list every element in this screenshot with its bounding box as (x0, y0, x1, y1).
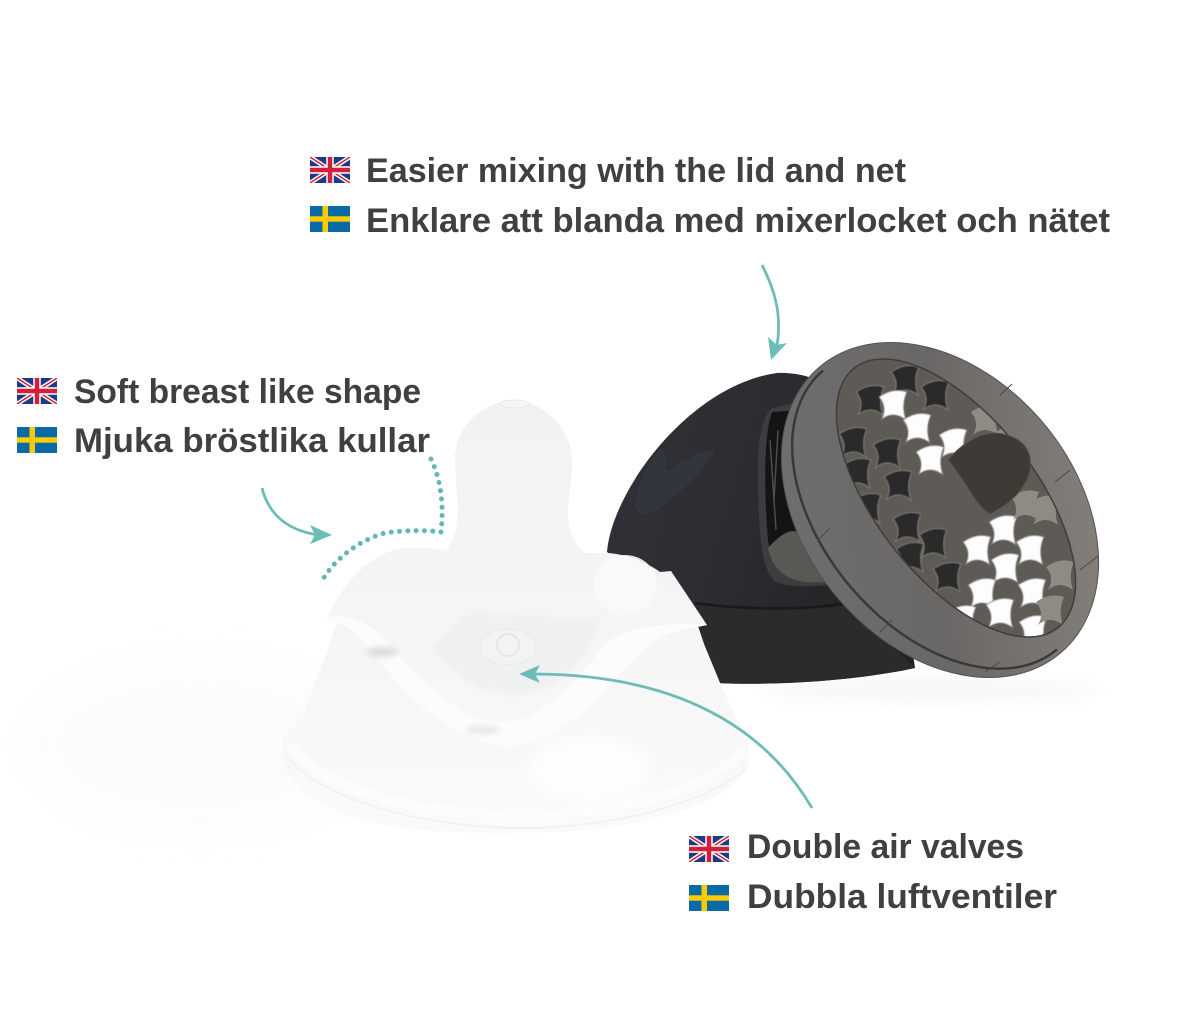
dome lower ring (690, 602, 915, 684)
english text: Soft breast like shape (74, 373, 421, 411)
mesh holes: see-through white (879, 390, 1047, 645)
callout: shape (17, 373, 430, 460)
dome side window (758, 400, 830, 586)
product: black mixer lid dome (607, 373, 915, 684)
english text: Easier mixing with the lid and net (366, 152, 906, 190)
teat silhouette (282, 400, 748, 833)
arrow: to breast like shape (262, 488, 332, 544)
mesh opening edge (791, 319, 1121, 677)
swedish text: Dubbla luftventiler (747, 878, 1057, 916)
wavy flange band (327, 616, 707, 747)
callout: mixing (310, 152, 1110, 240)
ring tick marks (818, 384, 1098, 672)
mesh holes: see-through dark (839, 365, 961, 592)
icon: Swedish flag (310, 206, 350, 232)
dome body (607, 373, 915, 684)
dotted outline: breast shape contour (322, 459, 442, 581)
shoulder bubble on right (593, 555, 657, 615)
icon: Swedish flag (17, 427, 57, 453)
tip nub (501, 400, 529, 408)
center knob (948, 433, 1030, 514)
icon: UK flag (310, 157, 350, 183)
product: clear silicone teat (282, 400, 748, 833)
soft ground shadow (30, 670, 1100, 820)
icon: UK flag (689, 836, 729, 862)
embossed heart (633, 447, 716, 516)
icon: UK flag (17, 378, 57, 404)
swedish text: Enklare att blanda med mixerlocket och nätet (366, 202, 1110, 240)
icon: Swedish flag (689, 885, 729, 911)
product: mixer net ring (780, 342, 1100, 678)
net mesh (837, 360, 1075, 636)
arrow: to air valves (519, 665, 812, 808)
ring outer body (716, 280, 1164, 740)
arrow: to mixer lid (762, 265, 787, 360)
mesh chips (971, 405, 1074, 625)
english text: Double air valves (747, 828, 1024, 866)
swedish text: Mjuka bröstlika kullar (74, 422, 430, 460)
callout: valves (689, 828, 1057, 916)
soft shadow marks (366, 647, 398, 657)
valve detail (480, 629, 536, 665)
base rim (290, 745, 745, 815)
inner valve area (430, 612, 600, 694)
